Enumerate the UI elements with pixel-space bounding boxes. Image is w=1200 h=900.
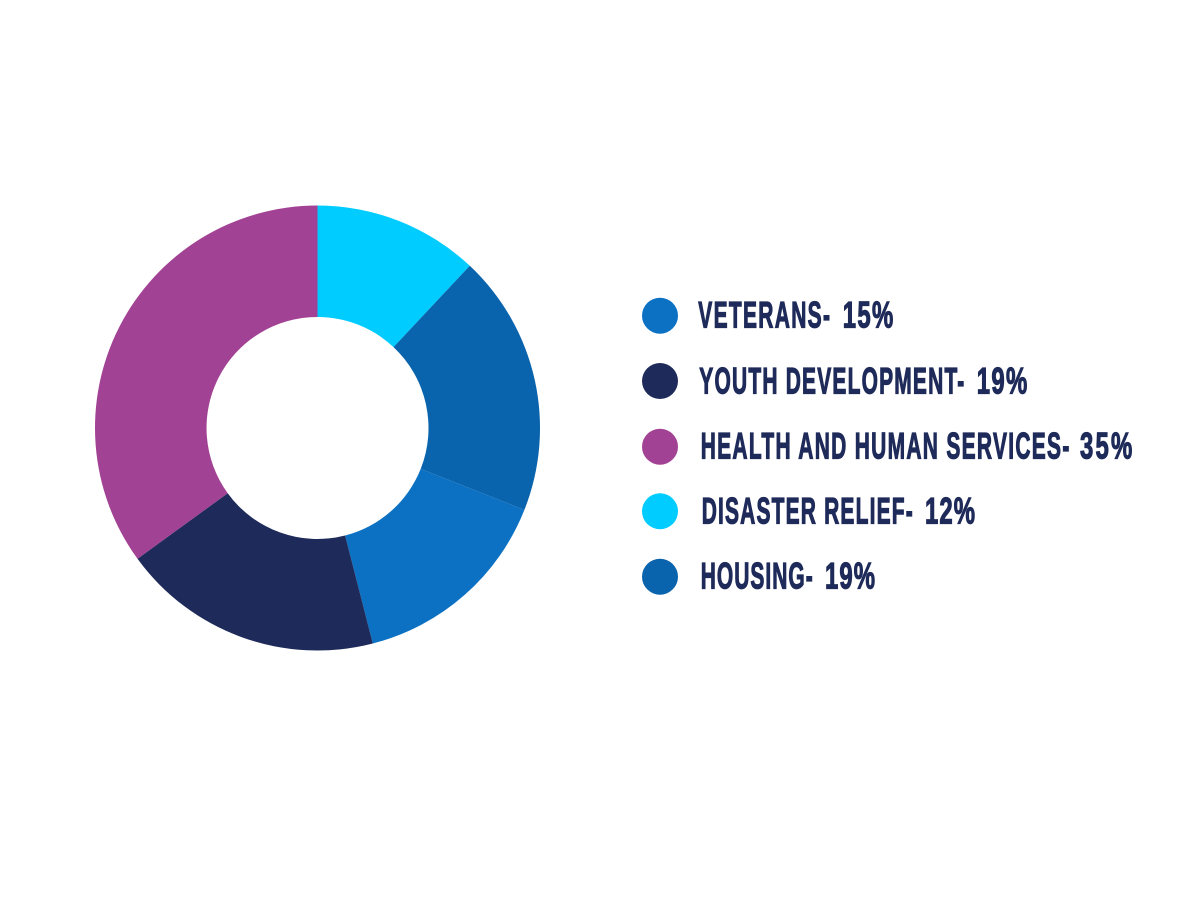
segment: housing 19% — [394, 266, 540, 510]
legend item: housing: 19% — [825, 555, 875, 597]
segment: health and human services 35% — [95, 206, 317, 559]
legend item: veterans: VETERANS- — [698, 296, 830, 336]
legend item: disaster relief — [642, 490, 975, 532]
legend item: housing — [642, 555, 875, 597]
legend item: youth development: 19% — [977, 360, 1027, 402]
legend item: youth development — [642, 360, 1027, 402]
legend item: veterans — [642, 294, 893, 336]
legend item: disaster relief: DISASTER RELIEF- — [702, 491, 913, 532]
legend — [642, 294, 1132, 597]
legend item: veterans: 15% — [843, 294, 893, 336]
legend item: disaster relief: 12% — [925, 490, 975, 532]
donut chart — [95, 206, 540, 650]
legend item: housing: HOUSING- — [701, 556, 813, 597]
segment: disaster relief 12% — [318, 206, 470, 347]
legend item: health and human services: 35% — [1080, 425, 1132, 467]
legend item: youth development: YOUTH DEVELOPMENT- — [699, 361, 964, 402]
segment: youth development 19% — [138, 493, 373, 650]
legend item: health and human services: HEALTH AND HUMAN SERVICES- — [701, 427, 1069, 467]
segment: veterans 15% — [345, 469, 524, 644]
